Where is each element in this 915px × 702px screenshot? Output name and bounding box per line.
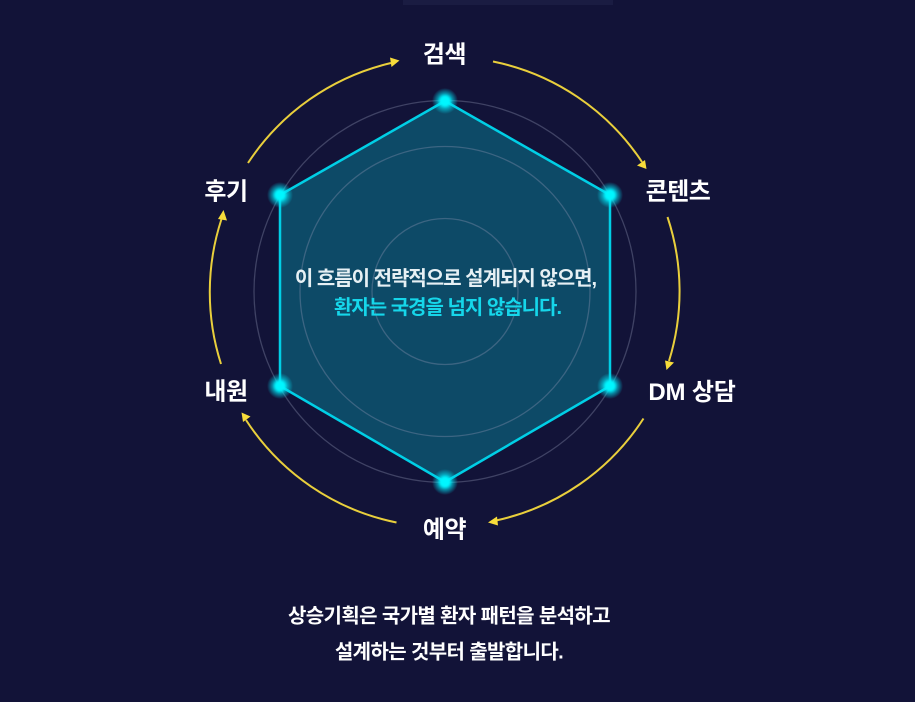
arrow: DM 상담 to 예약 bbox=[488, 418, 644, 526]
hexagon outline bbox=[280, 101, 610, 482]
center message: 이 흐름이 전략적으로 설계되지 않으면, bbox=[295, 267, 597, 290]
hexagon fill bbox=[280, 101, 610, 482]
concentric rings bbox=[254, 100, 636, 482]
node: 후기 bbox=[267, 182, 293, 208]
center message bbox=[295, 267, 597, 319]
label: 내원: 내원 bbox=[204, 378, 248, 406]
arrow: 콘텐츠 to DM 상담 bbox=[665, 217, 680, 370]
bottom caption: 상승기획은 국가별 환자 패턴을 분석하고 bbox=[288, 604, 610, 628]
node: 검색 bbox=[432, 88, 458, 114]
node: 콘텐츠 bbox=[597, 182, 623, 208]
arrow: 후기 to 검색 bbox=[248, 58, 400, 163]
bottom caption bbox=[288, 604, 610, 664]
bottom caption: 설계하는 것부터 출발합니다. bbox=[335, 640, 563, 664]
label: 검색: 검색 bbox=[423, 42, 466, 68]
label: 콘텐츠: 콘텐츠 bbox=[646, 178, 711, 206]
label: 후기: 후기 bbox=[204, 178, 248, 206]
arrow: 예약 to 내원 bbox=[242, 412, 396, 522]
node: 예약 bbox=[432, 469, 458, 495]
arrow: 내원 to 후기 bbox=[210, 210, 227, 364]
node: 내원 bbox=[267, 373, 293, 399]
node: DM 상담 bbox=[597, 373, 623, 399]
arrow: 검색 to 콘텐츠 bbox=[493, 62, 646, 169]
center message: 환자는 국경을 넘지 않습니다. bbox=[334, 296, 561, 319]
label: 예약: 예약 bbox=[423, 516, 466, 544]
label: DM 상담: DM 상담 bbox=[648, 379, 736, 406]
